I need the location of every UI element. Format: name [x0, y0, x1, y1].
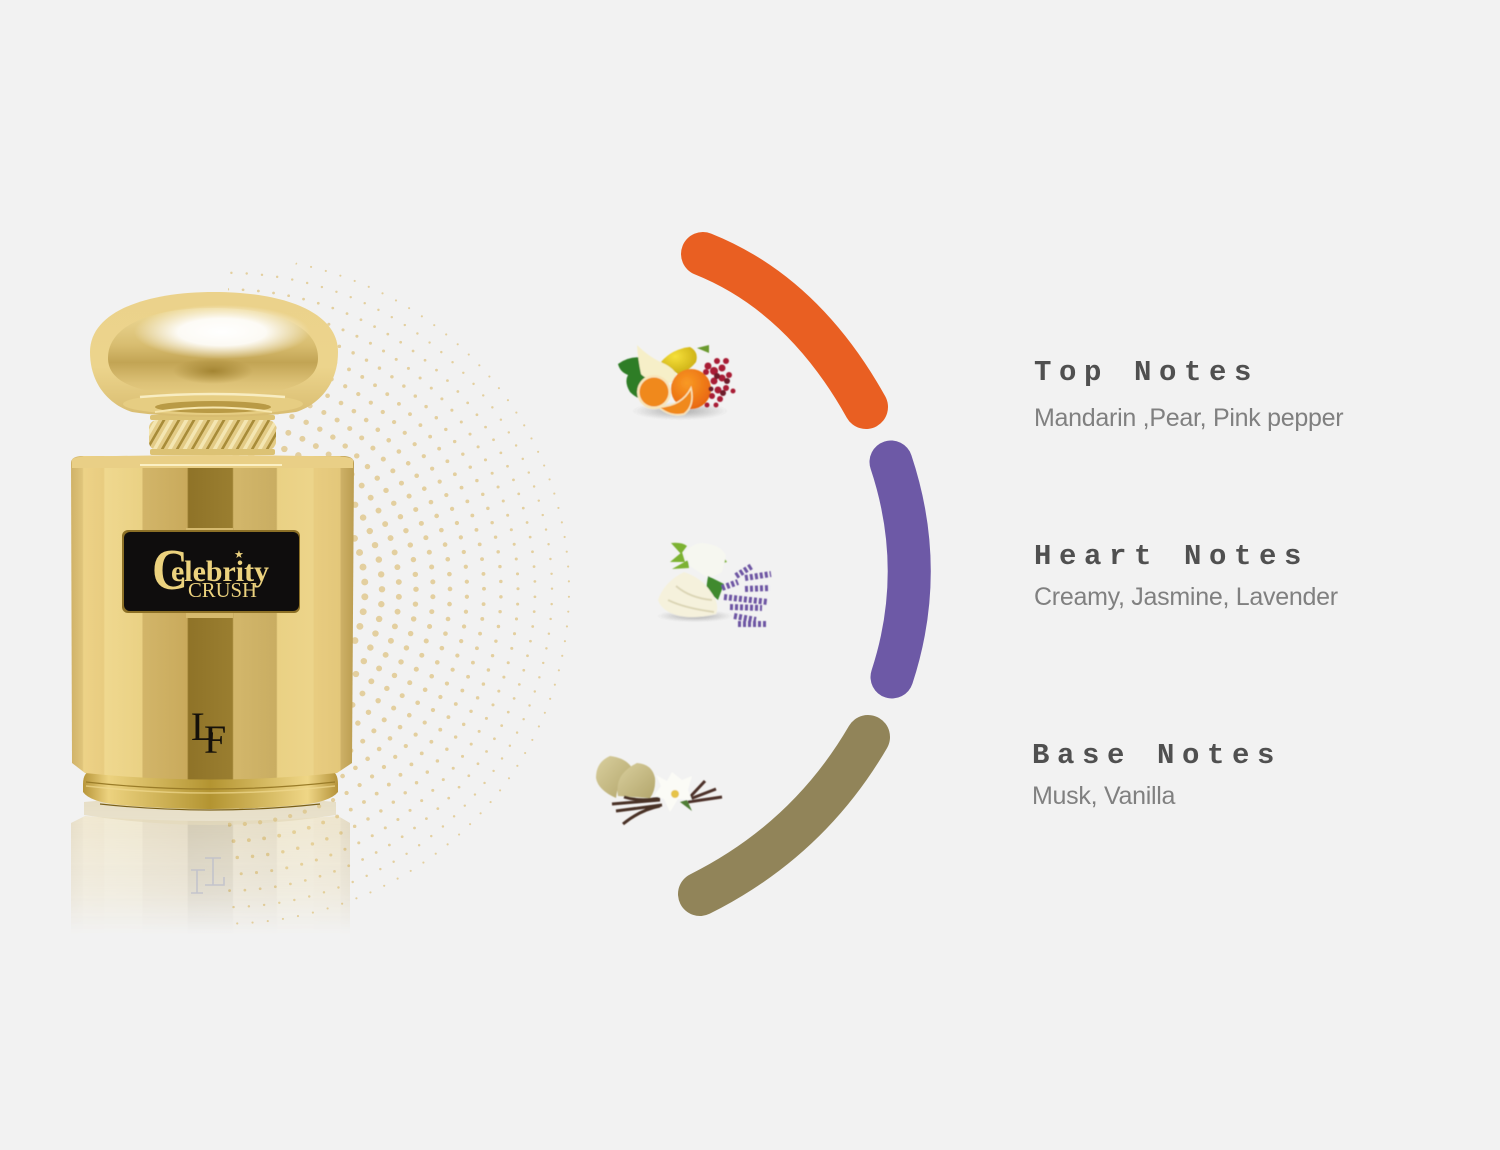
reflected monogram — [191, 858, 224, 893]
black label — [122, 530, 300, 613]
heart notes text — [1034, 540, 1338, 611]
top notes fruit illustration — [618, 345, 736, 420]
base notes text: Musk, Vanilla — [1032, 782, 1175, 810]
brand name: CRUSH — [188, 578, 257, 602]
LF monogram: L — [191, 704, 215, 749]
top notes text: Top Notes — [1034, 356, 1259, 389]
top notes text — [1034, 356, 1344, 432]
bottle base — [83, 770, 338, 810]
brand name: elebrity — [171, 555, 269, 588]
ribbed neck — [149, 415, 276, 455]
lavender sprigs — [722, 566, 771, 624]
bottle body — [71, 455, 354, 780]
base notes musk and vanilla illustration — [596, 756, 722, 824]
olive base notes arc — [700, 737, 868, 894]
halftone dot semicircle — [228, 262, 570, 924]
orange top notes arc — [703, 254, 866, 407]
brand name — [152, 537, 269, 602]
brand name: C — [152, 537, 188, 602]
domed cap — [90, 292, 338, 417]
heart notes flower illustration — [657, 543, 771, 624]
base notes text — [1032, 739, 1282, 810]
LF monogram: F — [204, 717, 226, 762]
pink pepper berries — [703, 358, 736, 408]
LF monogram — [191, 704, 226, 762]
top notes text: Mandarin ,Pear, Pink pepper — [1034, 404, 1343, 432]
heart notes text: Heart Notes — [1034, 540, 1309, 573]
base notes text: Base Notes — [1032, 739, 1282, 772]
brand name: ★ — [234, 549, 244, 561]
heart notes text: Creamy, Jasmine, Lavender — [1034, 583, 1338, 611]
purple heart notes arc — [891, 462, 909, 677]
perfume bottle — [71, 292, 354, 810]
bottle reflection — [71, 800, 350, 924]
